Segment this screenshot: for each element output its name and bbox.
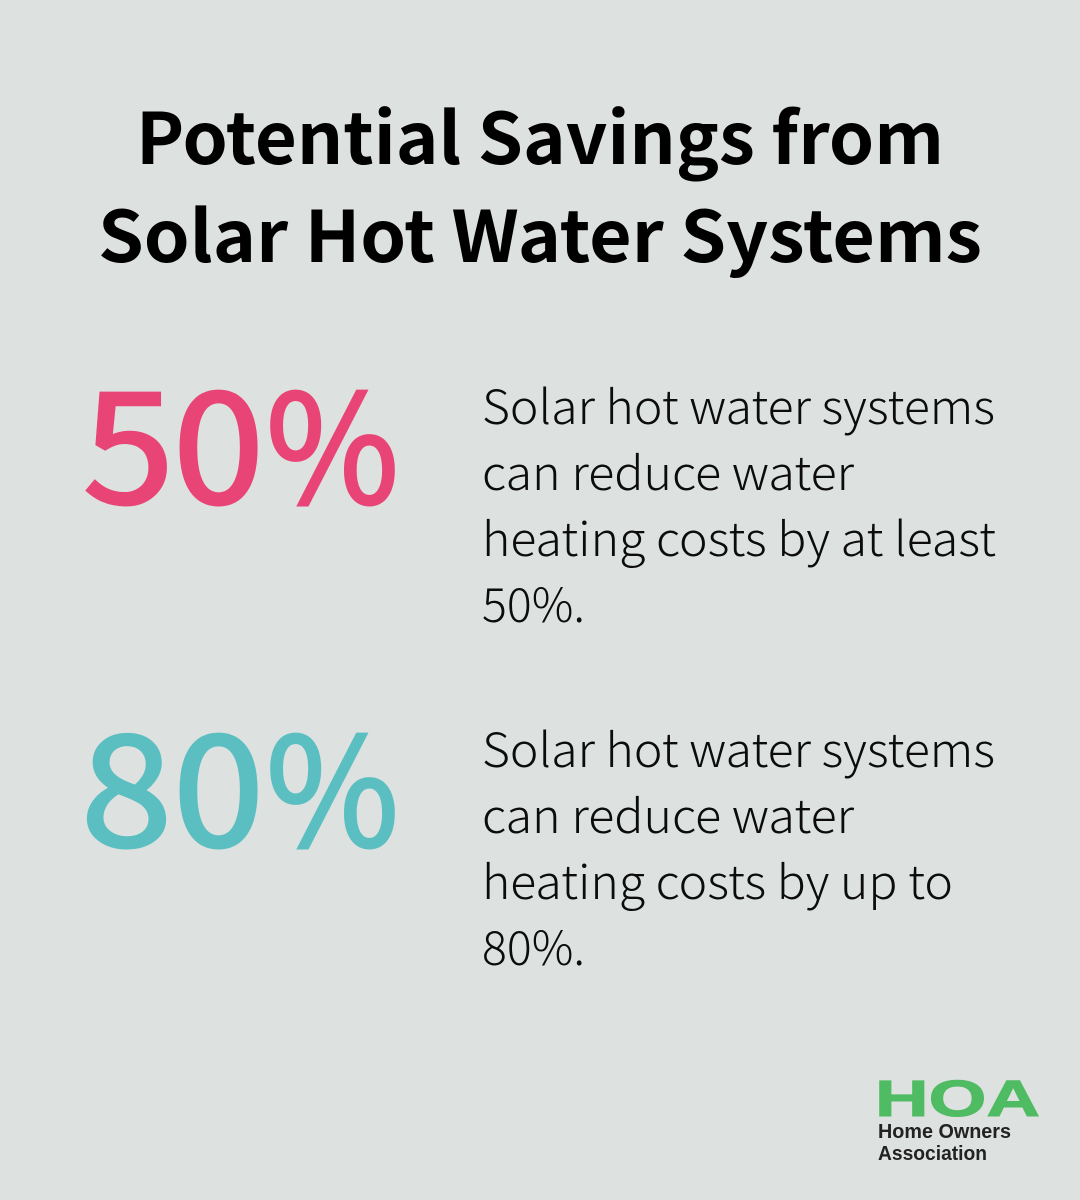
- stat: 80%: 8: [81, 673, 172, 890]
- stat: 50%: 0: [173, 330, 264, 547]
- title: Solar Hot Water Systems: [98, 181, 982, 283]
- stat: 50%: %: [266, 330, 399, 547]
- title: [98, 83, 982, 283]
- text block: 50% description: heating costs by at least: [482, 501, 996, 570]
- title: Potential Savings from: [136, 83, 944, 185]
- text block: 80% description: heating costs by up to: [482, 844, 953, 913]
- logo: Home Owners Association: HOA: [875, 1070, 1040, 1127]
- logo: Home Owners Association: Association: [878, 1143, 987, 1165]
- stat: 80%: 0: [173, 673, 264, 890]
- logo: Home Owners Association: [875, 1070, 1040, 1165]
- stat: 50%: 5: [83, 330, 174, 547]
- text block: 50% description: can reduce water: [482, 435, 854, 504]
- stat: 80%: %: [266, 673, 399, 890]
- text block: 80% description: 80%.: [482, 910, 585, 979]
- text block: 50% description: 50%.: [482, 567, 585, 636]
- text block: 50% description: [482, 369, 996, 636]
- text block: 80% description: can reduce water: [482, 778, 854, 847]
- logo: Home Owners Association: Home Owners: [878, 1121, 1011, 1143]
- text block: 80% description: Solar hot water systems: [482, 712, 995, 781]
- text block: 50% description: Solar hot water systems: [482, 369, 995, 438]
- text block: 80% description: [482, 712, 995, 979]
